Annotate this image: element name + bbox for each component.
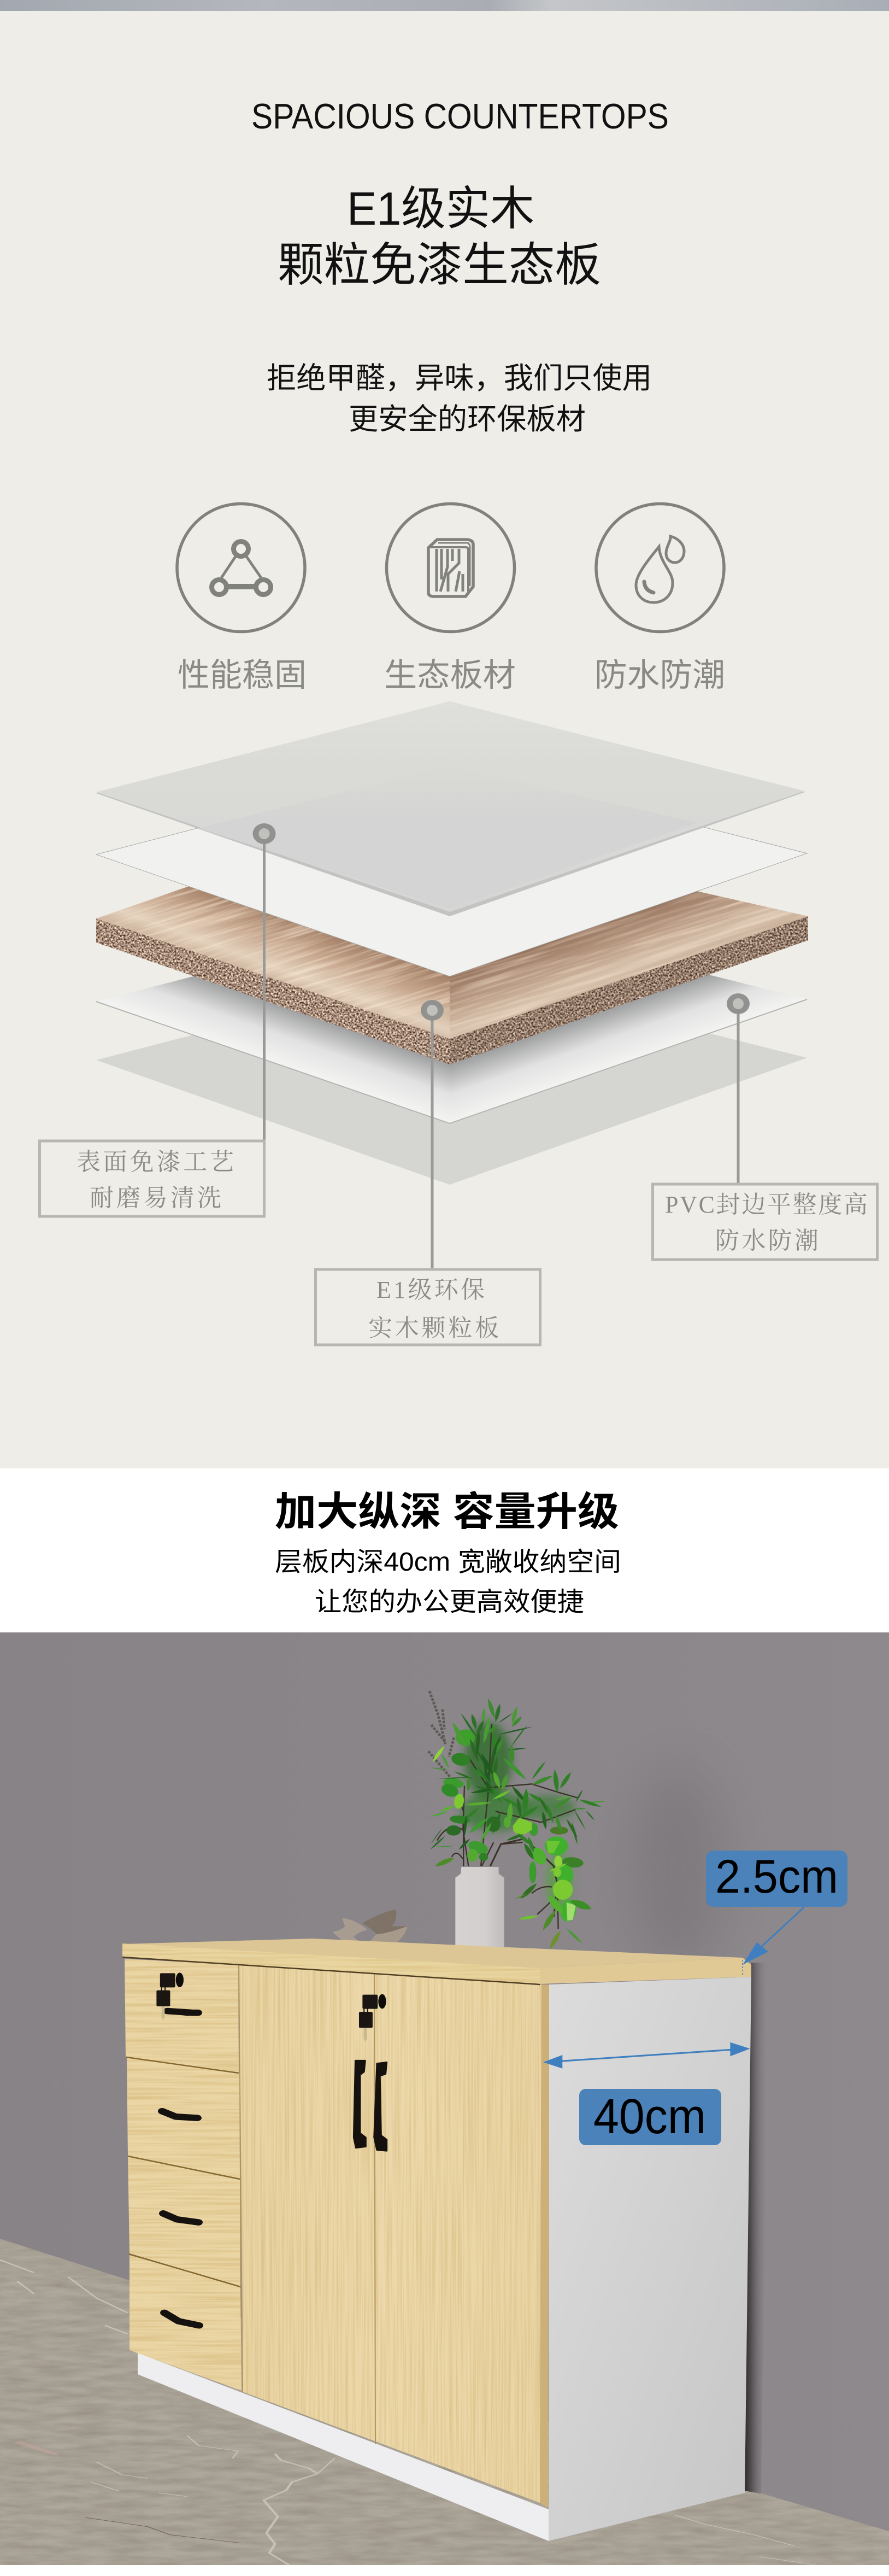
doors — [239, 1965, 549, 2508]
vase — [455, 1867, 504, 1956]
icon labels — [178, 657, 725, 693]
door lock — [359, 1994, 386, 2042]
callout: pvc edge: PVC封边平整度高 — [665, 1191, 868, 1218]
foliage mass — [461, 1722, 575, 1910]
icon labels: 生态板材 — [384, 657, 516, 693]
cabinet — [122, 1939, 751, 2541]
callout: surface — [39, 823, 275, 1216]
side panel — [549, 1977, 751, 2541]
cast shadow — [745, 1963, 768, 2494]
badge: 2.5cm: 2.5cm — [715, 1851, 838, 1903]
layer: top translucent sheet — [96, 701, 805, 916]
text block: depth description — [275, 1548, 621, 1617]
diagram: exploded board layers — [95, 701, 808, 1185]
panel: cabinet photo — [0, 1632, 889, 2565]
callout: pvc edge: 防水防潮 — [715, 1227, 819, 1254]
heading: chinese: 颗粒免漆生态板 — [278, 239, 601, 291]
drawers — [125, 1959, 242, 2391]
dense dark foliage — [463, 1729, 579, 1853]
arrow: depth dimension — [543, 2042, 750, 2069]
icon labels: 性能稳固 — [178, 657, 307, 693]
callout: surface: 耐磨易清洗 — [90, 1185, 221, 1211]
callout: surface: 表面免漆工艺 — [76, 1149, 234, 1175]
heading: english: SPACIOUS COUNTERTOPS — [251, 96, 669, 136]
stems — [437, 1724, 578, 1929]
drawer lock — [156, 1972, 199, 2020]
heading: depth upgrade: 加大纵深 容量升级 — [275, 1490, 619, 1534]
badge: 40cm: 40cm — [593, 2089, 706, 2144]
callout: core board: E1级环保 — [376, 1277, 485, 1303]
layer: lower white sheet — [96, 910, 807, 1123]
plinth — [138, 2353, 549, 2541]
text block: intro: 拒绝甲醛，异味，我们只使用 — [267, 362, 652, 395]
dried sprigs — [428, 1691, 454, 1777]
icon: stable performance — [177, 504, 305, 632]
plant in vase — [428, 1691, 605, 1956]
icon: eco board — [387, 504, 515, 632]
long leaves — [429, 1698, 605, 1950]
text block: depth description: 层板内深40cm 宽敞收纳空间 — [275, 1548, 621, 1577]
layer: upper white sheet — [96, 763, 807, 976]
top photo strip — [0, 0, 889, 11]
marble floor — [0, 2239, 889, 2565]
arrow: thickness pointer — [743, 1907, 804, 1976]
round leaves back — [440, 1729, 584, 1923]
callout: core board: 实木颗粒板 — [368, 1315, 499, 1342]
ornament — [333, 1910, 408, 1946]
icon: water drops — [596, 504, 724, 632]
heading: chinese — [278, 183, 601, 291]
text block: depth description: 让您的办公更高效便捷 — [315, 1588, 584, 1617]
drawer handles — [162, 2011, 199, 2326]
callout: core board — [316, 1000, 540, 1345]
door handles — [354, 2060, 387, 2151]
drawer gaps — [126, 2057, 240, 2287]
layer: particle board — [96, 887, 808, 1064]
layer: bottom sheet — [96, 968, 807, 1185]
icon labels: 防水防潮 — [594, 657, 725, 693]
wall — [0, 1632, 889, 2565]
callout: pvc edge — [652, 993, 878, 1260]
panel: board introduction — [0, 11, 889, 1468]
text block: intro: 更安全的环保板材 — [349, 403, 586, 436]
countertop — [122, 1939, 751, 1984]
heading: depth upgrade — [275, 1490, 621, 1617]
text block: intro — [267, 362, 652, 436]
heading: chinese: E1级实木 — [347, 183, 534, 235]
